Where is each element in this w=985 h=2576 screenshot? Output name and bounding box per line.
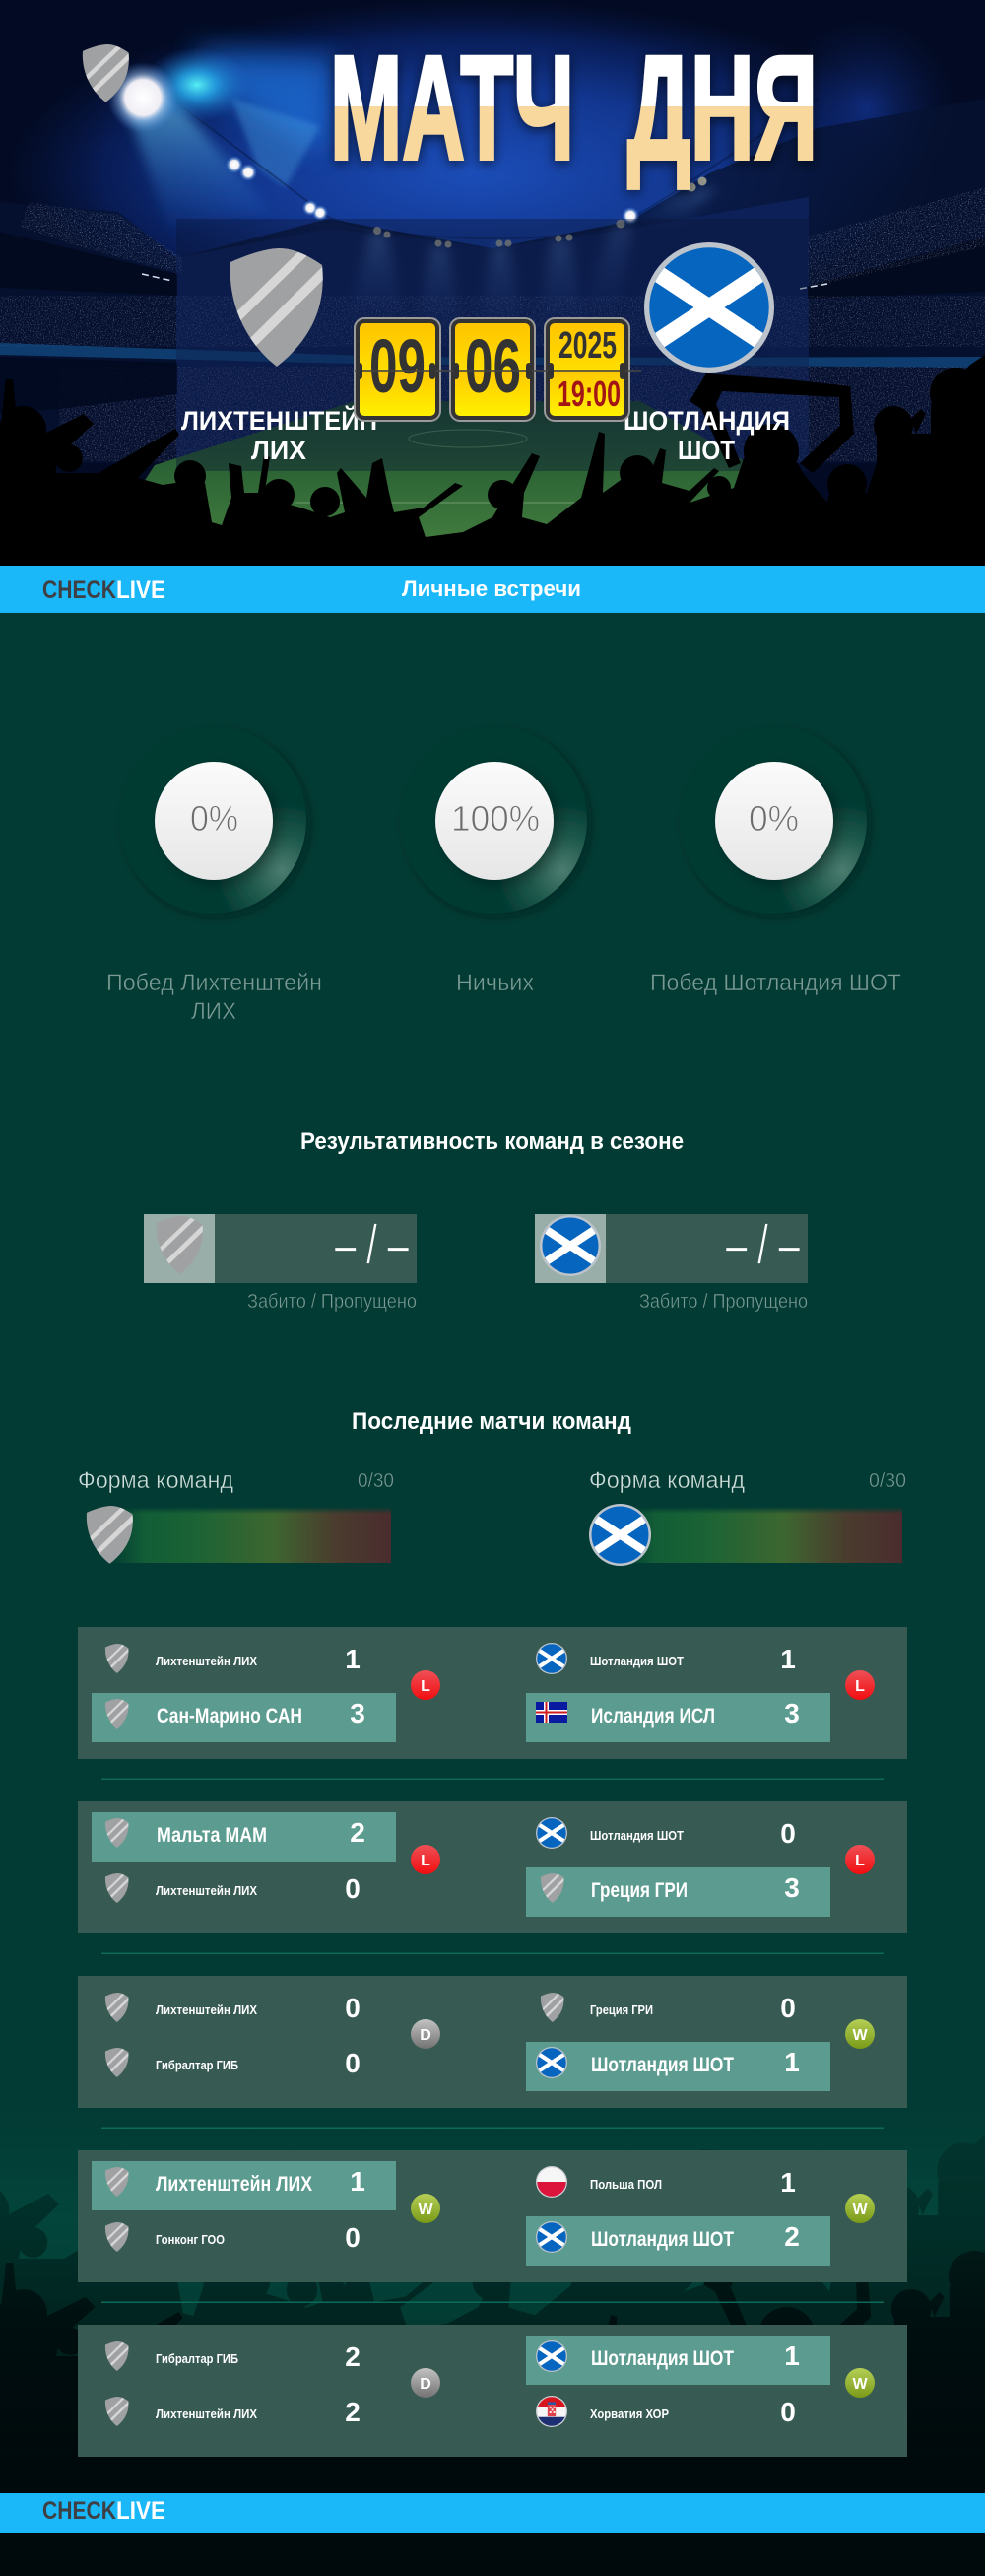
goals box: Liechtenstein <box>144 1213 417 1313</box>
heading: season performance: Результативность команд в сезоне <box>300 1128 684 1155</box>
match row 4: 1 <box>780 2167 796 2198</box>
card: year and time: 19:00 <box>558 373 621 414</box>
match row 4: W <box>418 2202 433 2218</box>
goals box: Scotland <box>535 1213 808 1313</box>
match row 4: W <box>852 2202 868 2218</box>
match row 1: 3 <box>784 1698 800 1729</box>
stat: Liechtenstein wins: Побед Лихтенштейн <box>106 970 322 996</box>
card: day <box>355 318 440 421</box>
stat: Scotland wins <box>650 726 901 996</box>
stat: Liechtenstein wins: 0% <box>190 798 238 839</box>
goals box: Liechtenstein: – / – <box>335 1213 410 1275</box>
match row 5: 2 <box>345 2341 361 2372</box>
match row 3: W <box>852 2027 868 2044</box>
match row 5: D <box>420 2376 431 2393</box>
match row 5: Лихтенштейн ЛИХ <box>156 2407 257 2421</box>
team name: Scotland <box>624 406 790 465</box>
match row 5: W <box>852 2376 868 2393</box>
title: ДНЯ <box>627 25 818 190</box>
flip date cards <box>355 318 641 421</box>
page background <box>0 566 985 2576</box>
match row 2: L <box>855 1853 865 1869</box>
match row 4: 0 <box>345 2222 361 2253</box>
match row 5: Хорватия ХОР <box>590 2407 669 2421</box>
match row 2: 0 <box>780 1818 796 1849</box>
stands <box>0 99 985 463</box>
icon: Poland flag <box>536 2166 567 2198</box>
match row 3: Гибралтар ГИБ <box>156 2058 238 2072</box>
match row 4: Польша ПОЛ <box>590 2177 662 2192</box>
form: Scotland <box>589 1467 906 1566</box>
bar heading: Личные встречи <box>402 576 581 601</box>
match row 5: Гибралтар ГИБ <box>156 2351 238 2366</box>
match row 1: 3 <box>350 1698 365 1729</box>
match row 1: 1 <box>345 1644 361 1674</box>
match row 3: 1 <box>784 2047 800 2077</box>
background crowd silhouette, far layer <box>0 2129 985 2360</box>
team name: Scotland: ШОТ <box>678 436 735 465</box>
icon: Croatia flag <box>536 2396 567 2427</box>
match row 2: Лихтенштейн ЛИХ <box>156 1883 257 1898</box>
form: Scotland: Форма команд <box>589 1467 745 1494</box>
footer bar: LIVE <box>116 2497 165 2525</box>
match row 1: Шотландия ШОТ <box>590 1654 684 1668</box>
stat: Liechtenstein wins <box>106 726 322 1025</box>
team info backdrop <box>176 219 809 471</box>
match row 2: 0 <box>345 1873 361 1904</box>
icon: Iceland flag <box>536 1702 567 1723</box>
top bar <box>0 566 985 613</box>
footer bar: CHECK <box>42 2497 116 2525</box>
form: Liechtenstein: Форма команд <box>78 1467 233 1494</box>
logo: CHECK <box>42 576 116 604</box>
match row 4: Лихтенштейн ЛИХ <box>156 2173 312 2196</box>
form: Scotland: 0/30 <box>869 1470 906 1492</box>
match row 5: 1 <box>784 2340 800 2371</box>
match row 3: 0 <box>780 1993 796 2023</box>
match row 1: Исландия ИСЛ <box>591 1705 715 1728</box>
match row 3: Греция ГРИ <box>590 2002 653 2017</box>
match row 3: Лихтенштейн ЛИХ <box>156 2002 257 2017</box>
match row 1 <box>78 1627 907 1759</box>
card: day: 09 <box>369 324 426 409</box>
match row 2: Греция ГРИ <box>591 1879 688 1902</box>
card: year and time <box>545 318 629 421</box>
card: year and time: 2025 <box>558 325 617 367</box>
match row 2: Шотландия ШОТ <box>590 1828 684 1843</box>
stat: draws: Ничьих <box>456 970 534 996</box>
team name: Liechtenstein: ЛИХТЕНШТЕЙН <box>181 405 377 436</box>
icon: Scotland flag <box>644 242 774 373</box>
form: Liechtenstein <box>78 1467 394 1564</box>
card: month: 06 <box>465 324 521 409</box>
goals box: Scotland: – / – <box>726 1213 801 1275</box>
background crowd silhouette, near layer <box>0 2238 985 2449</box>
match row 3 <box>78 1976 907 2108</box>
footer bar <box>0 2493 985 2533</box>
match row 5: 0 <box>780 2397 796 2427</box>
match row 1: L <box>855 1678 865 1695</box>
roof edge <box>164 94 818 238</box>
match row 2 <box>78 1801 907 1933</box>
stat: Scotland wins: 0% <box>749 798 799 839</box>
match row 3: 0 <box>345 2048 361 2078</box>
heading: recent matches: Последние матчи команд <box>352 1408 631 1435</box>
stat: Scotland wins: Побед Шотландия ШОТ <box>650 970 901 996</box>
card: month <box>450 318 535 421</box>
goals box: Liechtenstein: Забито / Пропущено <box>247 1291 417 1313</box>
field <box>98 401 896 552</box>
match row 4: Гонконг ГОО <box>156 2232 225 2247</box>
match row 3: D <box>420 2027 431 2044</box>
match row 1: L <box>421 1678 430 1695</box>
stat: draws: 100% <box>451 798 540 839</box>
icon: top-left crest <box>83 44 130 102</box>
match row 1: Лихтенштейн ЛИХ <box>156 1654 257 1668</box>
logo: LIVE <box>116 576 165 604</box>
team name: Liechtenstein: ЛИХ <box>251 436 306 465</box>
match row 3: 0 <box>345 1993 361 2023</box>
match row 2: 3 <box>784 1872 800 1903</box>
stat: Liechtenstein wins: ЛИХ <box>191 998 236 1025</box>
title: МАТЧ <box>330 25 574 190</box>
team name: Scotland: ШОТЛАНДИЯ <box>624 406 790 436</box>
stat: draws <box>400 726 587 996</box>
beams <box>128 91 271 229</box>
team name: Liechtenstein <box>181 405 377 465</box>
crowd silhouette foreground <box>0 355 985 566</box>
goals box: Scotland: Забито / Пропущено <box>639 1291 808 1313</box>
match row 1: 1 <box>780 1644 796 1674</box>
icon: Liechtenstein crest <box>230 247 326 367</box>
match row 2: Мальта МАМ <box>157 1824 267 1847</box>
match row 3: Шотландия ШОТ <box>591 2054 734 2076</box>
match row 4: 1 <box>350 2166 365 2197</box>
hero stadium background <box>0 0 985 566</box>
match row 4: Шотландия ШОТ <box>591 2228 734 2251</box>
match row 2: L <box>421 1853 430 1869</box>
match row 5: Шотландия ШОТ <box>591 2347 734 2370</box>
lights <box>143 47 251 122</box>
form: Liechtenstein: 0/30 <box>358 1470 394 1492</box>
match row 4: 2 <box>784 2221 800 2252</box>
match row 2: 2 <box>350 1817 365 1848</box>
match row 5 <box>78 2325 907 2457</box>
match row 4 <box>78 2150 907 2282</box>
match row 5: 2 <box>345 2397 361 2427</box>
match row 1: Сан-Марино САН <box>157 1705 302 1728</box>
